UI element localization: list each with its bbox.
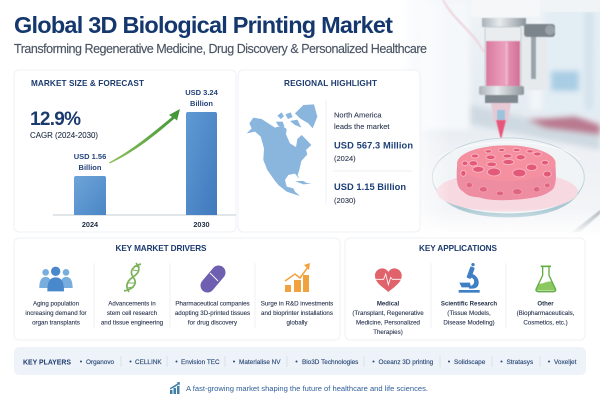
- text: application medical: Therapies): [373, 329, 403, 336]
- text: application other: [517, 300, 575, 326]
- stat: 2024 value: USD 567.3 Million: [334, 140, 413, 150]
- text: application medical: (Transplant, Regenerative: [352, 310, 424, 317]
- text: region lead: North America: [334, 110, 382, 120]
- heading: drivers: KEY MARKET DRIVERS: [116, 244, 207, 253]
- text: application research: Scientific Research: [441, 300, 497, 308]
- icon: people: [39, 267, 73, 291]
- icon: microscope: [459, 263, 480, 293]
- text: application medical: Medicine, Personalized: [356, 320, 421, 326]
- list: company names: CELLINK: [135, 359, 162, 366]
- text: application medical: [352, 300, 424, 336]
- heading: key players: KEY PLAYERS: [23, 360, 71, 366]
- text: driver 3: for drug discovery: [188, 320, 238, 326]
- list: company names: Solidscape: [454, 359, 486, 366]
- stat: 2030 value: USD 1.15 Billion: [334, 182, 406, 192]
- bar chart: 2024: [82, 220, 99, 229]
- bar chart: Billion: [79, 163, 102, 172]
- text: driver 4: Surge in R&D investments: [261, 300, 333, 308]
- text: application research: (Tissue Models,: [447, 310, 491, 317]
- text: driver 2: [101, 300, 164, 326]
- text: driver 3: [175, 300, 250, 326]
- stat: CAGR: [30, 109, 98, 140]
- stat: 2030 value: (2030): [334, 196, 356, 205]
- text: application other: (Biopharmaceuticals,: [517, 310, 575, 317]
- text: driver 4: globally: [287, 320, 308, 326]
- text: application research: [441, 300, 497, 326]
- icon: heart: [375, 268, 402, 292]
- text: application other: Other: [537, 300, 554, 308]
- text: driver 4: [261, 300, 333, 326]
- stat: CAGR: 12.9%: [30, 109, 81, 130]
- icon: footer chart: [170, 382, 180, 394]
- icon: flask: [536, 266, 556, 292]
- list: company names: Oceanz 3D printing: [378, 359, 434, 366]
- panel: key players: [14, 347, 586, 375]
- list: company names: Stratasys: [506, 359, 533, 366]
- panel: key applications: [345, 238, 585, 340]
- panel: regional highlight: [238, 70, 420, 232]
- heading: regional: REGIONAL HIGHLIGHT: [284, 79, 377, 88]
- list: company names: Bio3D Technologies: [302, 359, 358, 366]
- text: application other: Cosmetics, etc.): [523, 320, 568, 326]
- subtitle: Transforming Regenerative Medicine, Drug Discovery & Personalized Healthcare: [14, 42, 427, 56]
- stat: 2024 value: [334, 140, 413, 163]
- text: driver 2: and tissue engineering: [101, 320, 164, 326]
- text: driver 3: Pharmaceutical companies: [175, 300, 250, 308]
- text: driver 1: increasing demand for: [25, 310, 87, 317]
- bar chart: USD 3.24: [185, 88, 219, 97]
- photo: bioprinter nozzle above petri dish: [400, 0, 600, 240]
- list: company names: Envision TEC: [181, 359, 220, 366]
- heading: applications: KEY APPLICATIONS: [419, 244, 498, 253]
- text: driver 4: and bioprinter installations: [261, 310, 333, 317]
- list: company names: Voxeljet: [554, 359, 577, 366]
- list: company names: Materialise NV: [239, 359, 281, 366]
- bar chart: [53, 88, 236, 229]
- arrow: growth: [109, 109, 180, 164]
- heading: market size: MARKET SIZE & FORECAST: [31, 79, 144, 88]
- text: application medical: Medical: [377, 300, 399, 308]
- stat: CAGR: CAGR (2024-2030): [30, 131, 98, 140]
- icon: rising chart: [285, 263, 310, 292]
- text: region lead: [334, 110, 390, 131]
- icon: capsule: [208, 272, 218, 286]
- text: driver 3: adopting 3D-printed tissues: [175, 310, 250, 317]
- text: driver 2: stem cell research: [107, 310, 158, 317]
- icon: DNA: [124, 263, 141, 292]
- map: North America: [247, 104, 317, 196]
- bar chart: USD 1.56: [74, 152, 106, 161]
- text: driver 2: Advancements in: [108, 300, 156, 308]
- panel: market size and forecast: [14, 70, 236, 232]
- footer message: A fast-growing market shaping the future of healthcare and life sciences.: [186, 384, 428, 393]
- list: company names: [80, 359, 577, 366]
- text: driver 1: organ transplants: [32, 320, 80, 326]
- stat: 2030 value: [334, 182, 406, 205]
- text: application research: Disease Modeling): [443, 320, 495, 326]
- text: driver 1: Aging population: [33, 300, 80, 308]
- bar chart: Billion: [190, 99, 213, 108]
- bar chart: 2030: [193, 220, 210, 229]
- text: driver 1: [25, 300, 87, 326]
- stat: 2024 value: (2024): [334, 154, 356, 163]
- title: Global 3D Biological Printing Market: [14, 12, 393, 38]
- panel: key market drivers: [14, 238, 340, 340]
- list: company names: Organovo: [86, 359, 115, 366]
- text: region lead: leads the market: [334, 122, 390, 131]
